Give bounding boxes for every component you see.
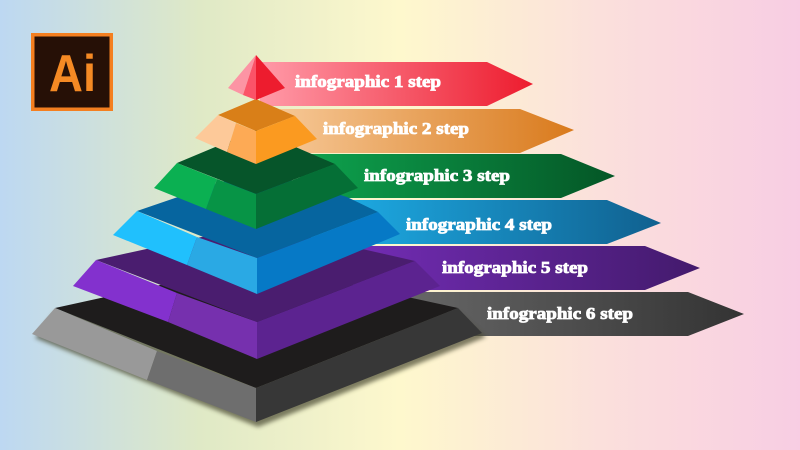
pyramid tier 4: blue bbox=[113, 170, 400, 294]
arrow: step 5: infographic 5 step bbox=[442, 258, 588, 277]
pyramid tier 5: purple bbox=[73, 225, 440, 359]
arrow: step 2 bbox=[280, 109, 574, 153]
arrow: step 2: infographic 2 step bbox=[323, 119, 469, 138]
arrow: step 4: infographic 4 step bbox=[406, 215, 552, 234]
arrow: step 5 bbox=[300, 246, 700, 290]
arrow: step 1: infographic 1 step bbox=[295, 72, 441, 91]
arrow: step 6: infographic 6 step bbox=[487, 304, 633, 323]
arrow: step 3: infographic 3 step bbox=[364, 166, 510, 185]
arrow: step 3 bbox=[300, 154, 615, 198]
arrow: step 1 bbox=[260, 62, 533, 106]
arrow: step 6 bbox=[300, 292, 744, 336]
icon: Adobe Illustrator logo: Ai bbox=[49, 45, 96, 103]
pyramid tier 6: black bbox=[32, 264, 486, 427]
pyramid tier 2: orange bbox=[195, 99, 317, 164]
arrow: step 4 bbox=[300, 200, 661, 244]
pyramid tier 1: red tip bbox=[228, 55, 285, 100]
icon: Adobe Illustrator logo bbox=[31, 33, 113, 111]
pyramid tier 3: green bbox=[154, 130, 358, 229]
